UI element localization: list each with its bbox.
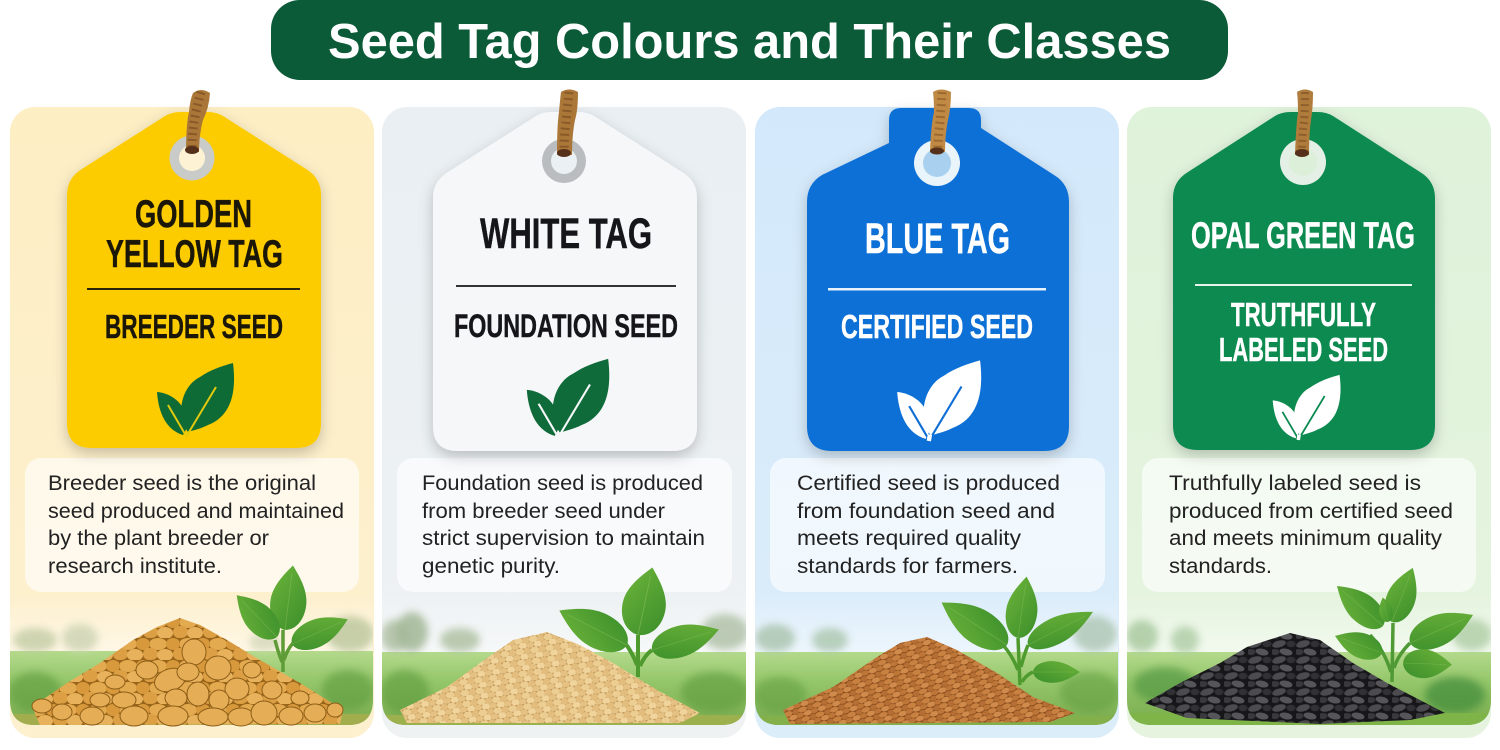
- description card: seed produced and maintained: [48, 500, 344, 523]
- tag: opal green: TRUTHFULLY: [1231, 296, 1376, 333]
- seed pile: pale foundation seed: [400, 632, 700, 723]
- farm scene: field background: [10, 612, 373, 725]
- description card: from breeder seed under: [422, 500, 665, 523]
- title banner: Seed Tag Colours and Their Classes: [328, 15, 1171, 69]
- seed pile: black seed: [1145, 633, 1445, 724]
- description card: research institute.: [48, 555, 222, 578]
- plant: seedling: [1327, 563, 1479, 682]
- tag eyelet and rope: [914, 90, 960, 186]
- farm scene: field background: [1127, 616, 1491, 725]
- description card: genetic purity.: [422, 555, 560, 578]
- description card: by the plant breeder or: [48, 527, 269, 550]
- description card: strict supervision to maintain: [422, 527, 705, 550]
- plant: seedling: [932, 574, 1099, 685]
- plant: seedling: [226, 563, 353, 672]
- description card: from foundation seed and: [797, 500, 1055, 523]
- description card: produced from certified seed: [1169, 500, 1453, 523]
- description card: [1142, 458, 1476, 592]
- description card: meets required quality: [797, 527, 1022, 550]
- tag eyelet and rope: [1280, 90, 1326, 185]
- icon: leaf: [157, 363, 234, 437]
- seed pile: golden soybeans: [32, 618, 343, 726]
- panel: white tag: [381, 90, 749, 738]
- tag: blue: [807, 90, 1069, 451]
- panel: golden yellow tag: [9, 90, 374, 738]
- panel: opal green tag: [1126, 90, 1492, 738]
- tag: white: [433, 90, 697, 451]
- description card: standards.: [1169, 555, 1272, 578]
- title banner: [271, 0, 1228, 80]
- seed pile: brown certified seed: [783, 637, 1075, 724]
- farm scene: field background: [382, 608, 746, 725]
- icon: leaf: [527, 359, 609, 438]
- tag: white: WHITE TAG: [480, 210, 652, 258]
- description card: standards for farmers.: [797, 555, 1018, 578]
- icon: leaf: [897, 360, 981, 441]
- tag: golden yellow: BREEDER SEED: [105, 308, 283, 345]
- tag: golden yellow: GOLDEN: [135, 193, 252, 236]
- tag eyelet and rope: [170, 90, 214, 180]
- panel: blue tag: [754, 90, 1120, 738]
- icon: leaf: [1273, 375, 1341, 440]
- tag: opal green: [1173, 90, 1435, 450]
- description card: Foundation seed is produced: [422, 472, 703, 495]
- description card: Truthfully labeled seed is: [1169, 472, 1421, 495]
- description card: and meets minimum quality: [1169, 527, 1443, 550]
- description card: [770, 458, 1105, 592]
- tag eyelet and rope: [542, 90, 586, 183]
- description card: [25, 458, 359, 592]
- description card: Breeder seed is the original: [48, 472, 316, 495]
- plant: seedling: [551, 563, 724, 677]
- tag: golden yellow: [67, 90, 321, 448]
- farm scene: field background: [755, 612, 1118, 725]
- tag: blue: CERTIFIED SEED: [841, 308, 1033, 345]
- description card: Certified seed is produced: [797, 472, 1060, 495]
- description card: [397, 458, 732, 592]
- tag: white: FOUNDATION SEED: [454, 308, 678, 344]
- tag: opal green: LABELED SEED: [1219, 331, 1388, 368]
- tag: golden yellow: YELLOW TAG: [106, 233, 283, 276]
- tag: blue: BLUE TAG: [865, 215, 1010, 263]
